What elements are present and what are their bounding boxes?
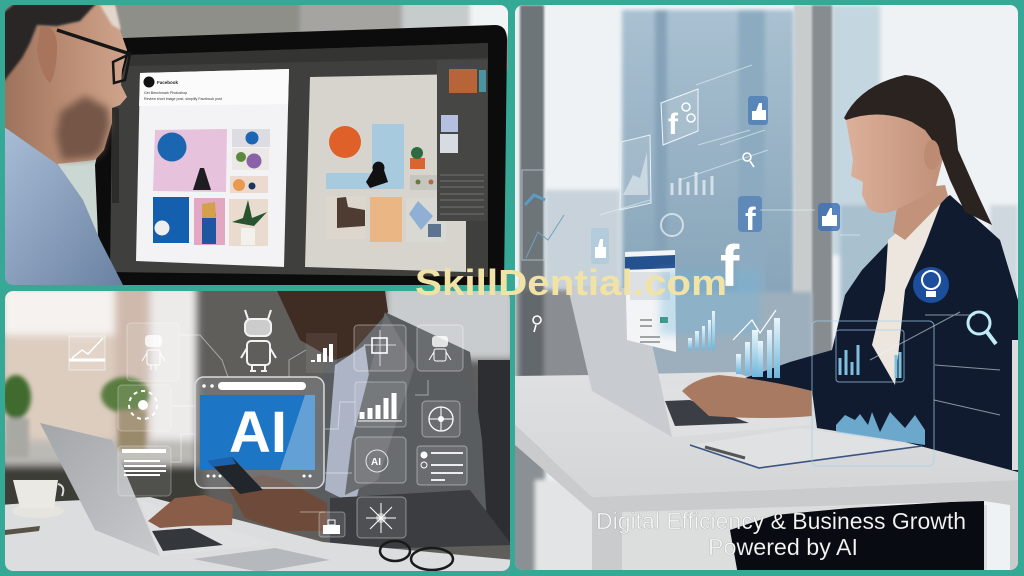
card list <box>640 320 660 342</box>
clipboard <box>690 428 922 468</box>
window dots <box>208 474 310 478</box>
centre graph panel <box>620 135 651 210</box>
left chart panel <box>522 170 564 260</box>
bars chart centre <box>736 318 780 378</box>
post caption line 2: Review short image post, simplify Facebook post <box>144 97 222 101</box>
ear <box>924 140 940 170</box>
beard <box>56 96 110 160</box>
post caption: Get Benchmark Photoshop <box>144 91 187 95</box>
tile: pink with blue circle <box>153 129 227 192</box>
tool strip <box>112 108 119 203</box>
icon: checklist panel <box>417 446 467 485</box>
floating like icon left <box>591 228 609 264</box>
orange textured tile <box>370 197 402 242</box>
caption line 2: Powered by AI <box>708 534 858 560</box>
chart on jacket <box>840 345 900 378</box>
icon: text list panel <box>118 446 171 496</box>
keyboard <box>152 528 223 551</box>
hologram charts <box>688 310 934 466</box>
panel: designer at monitor <box>0 0 520 285</box>
tile: orange ball <box>230 176 268 193</box>
floating facebook and gears panel <box>661 89 698 145</box>
tile: small blue circle <box>232 129 270 147</box>
shirt <box>5 127 123 285</box>
window frames <box>520 5 832 380</box>
AI label: AI <box>229 400 287 465</box>
color picker <box>449 69 477 93</box>
keyboard <box>665 400 749 426</box>
hair <box>0 3 97 82</box>
post title: Facebook <box>157 80 179 85</box>
desk front and legs <box>515 425 1018 575</box>
monitor bezel <box>95 25 507 285</box>
layer thumbnail 1 <box>441 115 458 132</box>
suit jacket <box>300 312 488 545</box>
lapel <box>345 312 415 495</box>
small bar row <box>672 172 712 195</box>
blazer <box>745 195 1018 472</box>
icon: AI network panel <box>357 497 406 538</box>
head <box>277 291 388 360</box>
gear icon outline <box>661 214 683 236</box>
coffee cup <box>12 480 64 518</box>
glass reflection <box>280 395 315 470</box>
white blouse <box>872 192 945 385</box>
floating facebook icon: f <box>745 201 756 237</box>
phone top edge <box>208 457 236 467</box>
icon: line chart <box>69 336 105 370</box>
tile: blue with sphere <box>153 197 189 243</box>
data panel on jacket <box>812 321 934 466</box>
blue area chart left <box>836 412 925 445</box>
icon: chip panel <box>354 325 406 371</box>
card image <box>630 272 670 300</box>
floating facebook icon <box>738 196 762 237</box>
facebook post card <box>625 250 676 352</box>
woman's legs under desk <box>730 500 984 575</box>
left window blur <box>0 285 515 515</box>
man in suit <box>277 291 512 550</box>
right artboard: moodboard <box>305 74 466 272</box>
ear <box>37 27 57 83</box>
icon: small bar chart <box>306 333 337 373</box>
caption line 1: Digital Efficiency & Business Growth <box>596 508 966 534</box>
typing hand <box>148 495 233 528</box>
eyeglasses on desk <box>380 541 453 570</box>
hands over keyboard <box>682 375 812 418</box>
small magnifier left <box>533 316 541 332</box>
post header <box>139 69 289 106</box>
tile: aloe plant <box>229 199 268 246</box>
lower background <box>505 290 812 575</box>
layer rows <box>440 175 484 214</box>
icon: camera <box>319 512 345 537</box>
icon: AI gear panel: AI <box>371 457 381 468</box>
potted plants <box>1 375 149 458</box>
glow behind card <box>660 270 760 335</box>
tile: plant and ball <box>232 148 269 170</box>
blurred office background <box>0 285 515 571</box>
panel: AI businessman <box>0 285 515 575</box>
blurred office background <box>5 5 508 236</box>
smartphone <box>208 457 263 494</box>
layer thumbnail 2 <box>440 134 458 153</box>
green dots tile <box>410 175 440 190</box>
glasses <box>57 30 130 83</box>
icon: bar chart panel <box>355 382 406 427</box>
pen on desk <box>5 526 40 535</box>
editor window <box>110 43 488 277</box>
lightbulb badge <box>913 267 949 303</box>
icon: network wheel panel <box>422 401 460 437</box>
layers palette <box>437 60 487 221</box>
trend line <box>733 310 776 340</box>
caption <box>596 508 966 560</box>
panel: woman with laptop <box>505 5 1020 575</box>
color strip <box>479 70 486 92</box>
blue paper tile <box>409 201 441 237</box>
editor toolbar <box>128 43 488 66</box>
right chair <box>478 360 513 545</box>
legs background below desk <box>622 505 987 575</box>
AI blue screen <box>200 395 315 470</box>
orange circle <box>329 126 361 158</box>
base <box>592 385 810 437</box>
card header <box>625 255 675 270</box>
black blob <box>366 162 388 188</box>
neck <box>893 185 948 240</box>
woman <box>745 75 1018 472</box>
small plant <box>410 147 425 169</box>
left artboard: social post <box>136 69 289 267</box>
hair <box>844 75 992 225</box>
floating like icon right <box>818 203 840 231</box>
icon: robot panel right <box>417 325 463 371</box>
laptop lid <box>40 423 160 556</box>
lid <box>568 288 672 437</box>
icon: small robot panel <box>127 323 179 381</box>
magnifier icon <box>968 312 996 344</box>
connector lines <box>171 335 428 512</box>
icon: big robot <box>241 310 276 371</box>
icon: circuit node panel <box>118 385 171 431</box>
phone hand <box>227 475 327 531</box>
window address bar <box>218 382 306 390</box>
small magnifier icon <box>743 153 754 167</box>
window background <box>515 5 1018 570</box>
laptop <box>40 423 275 556</box>
floating like icon <box>748 96 768 125</box>
floating facebook and gears panel: f <box>668 108 679 141</box>
man in profile <box>0 3 130 285</box>
shirt <box>325 345 375 505</box>
face <box>846 95 946 213</box>
hands <box>148 475 327 531</box>
watermark: SkillDential.com <box>415 262 727 303</box>
desk top <box>515 372 1018 497</box>
tile: gold and blue figure <box>194 198 225 245</box>
window dots top <box>204 384 212 388</box>
skyline buildings <box>545 5 1018 325</box>
green button <box>660 317 668 323</box>
central AI window <box>195 377 324 488</box>
icon: AI gear panel <box>355 437 406 483</box>
pale forehead highlight <box>100 5 121 30</box>
bars group <box>688 311 715 350</box>
post logo <box>144 76 154 88</box>
face and neck <box>0 5 127 164</box>
hologram connector lines <box>600 65 1000 415</box>
right wall edge <box>1012 340 1020 470</box>
large facebook f: f <box>720 234 740 299</box>
notebook <box>193 548 330 572</box>
laptop base <box>140 500 275 556</box>
desk <box>0 497 515 575</box>
laptop <box>568 288 810 437</box>
dark brown tile <box>337 197 365 228</box>
sleeve <box>330 490 512 550</box>
light blue shape <box>326 124 404 189</box>
